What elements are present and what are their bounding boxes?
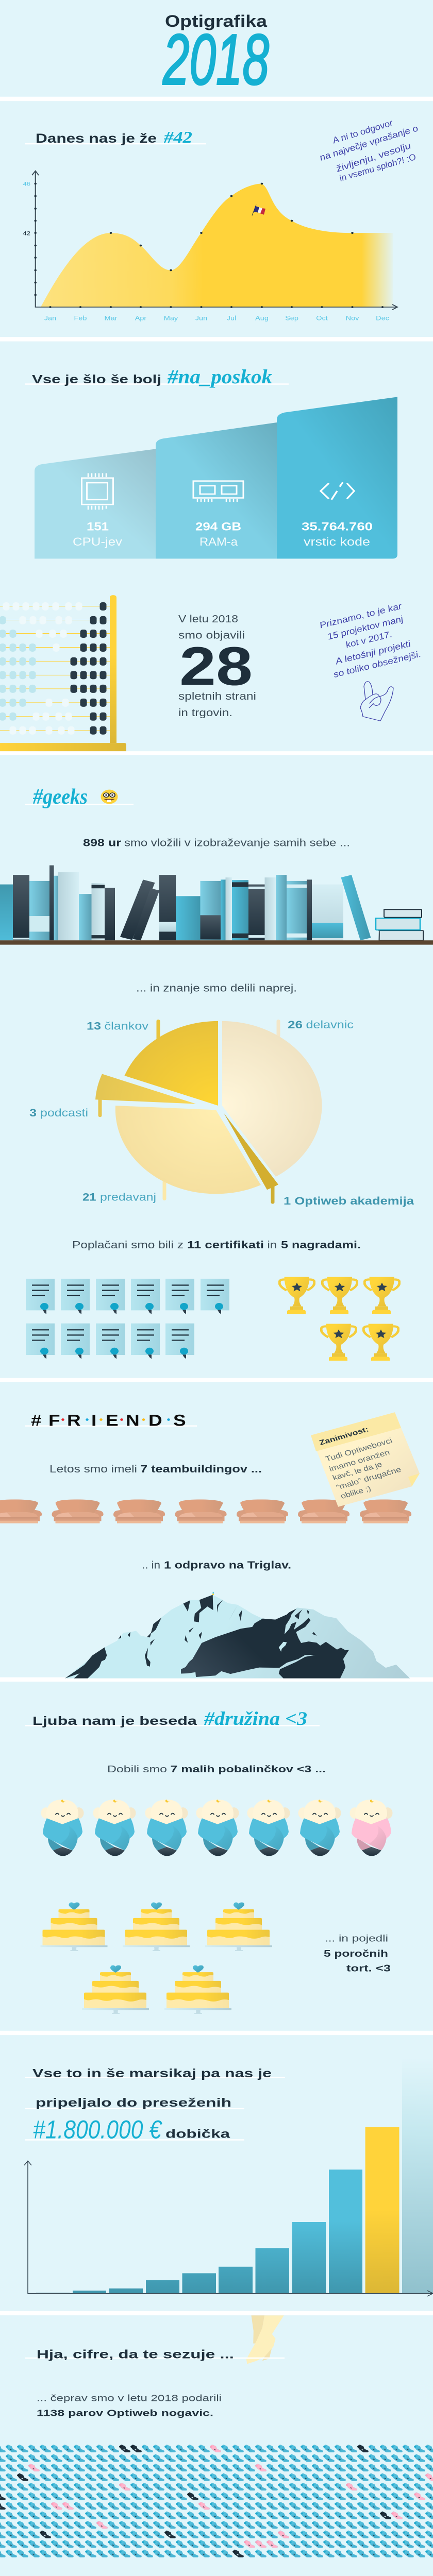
label: 3 podcasti: 3 — [29, 1107, 37, 1119]
panel: profit — [0, 2035, 433, 2311]
panel: geeks — [0, 755, 433, 1378]
heading: Vse to in še marsikaj — [25, 2067, 285, 2144]
area chart: Sep — [285, 314, 298, 321]
heading: Hja, cifre, da te sezuje: Hja, cifre, da te sezuje ... — [37, 2348, 234, 2361]
heading: Vse to in še marsikaj: dobička — [165, 2128, 230, 2141]
stat card: RAM — [156, 422, 277, 558]
text: 7 teambuildings: 7 teambuildingov ... — [140, 1463, 262, 1475]
sticky note: Zanimivost: imamo oranžen — [328, 1448, 391, 1473]
text block: 28 websites: smo objavili — [178, 629, 245, 641]
handwritten note: fewer projects: Priznamo, to je kar — [318, 601, 404, 630]
panel: title — [0, 0, 433, 99]
area chart — [23, 171, 397, 321]
heading: Danes nas je že #42 — [25, 128, 206, 146]
icon: CPU chip — [81, 473, 113, 510]
stat card: CPU: CPU-jev — [73, 536, 122, 549]
handwritten note: fewer projects: kot v 2017. — [344, 629, 393, 650]
area chart: Aug — [255, 314, 269, 321]
stat card: lines of code: vrstic kode — [304, 536, 370, 549]
area chart: Apr — [135, 314, 147, 321]
stat card: CPU — [35, 449, 156, 558]
text: 1138 pairs of socks: ... čeprav smo v letu 2018 podarili — [37, 2393, 222, 2403]
icon: code brackets — [321, 482, 354, 500]
stat card: CPU: 151 — [87, 521, 109, 533]
handwritten note: answer to everything: življenju, vesolju — [334, 141, 412, 174]
heading: Vse je šlo še bolj #na_poskok: #na_poskok — [167, 366, 272, 388]
text block: 28 websites: V letu 2018 — [178, 613, 238, 625]
area chart: Dec — [376, 314, 389, 321]
sticky note: Zanimivost: Tudi Optiwebovci — [324, 1437, 394, 1463]
panel: infrastructure and projects — [0, 342, 433, 751]
side strip — [402, 2058, 433, 2293]
stat card: RAM: RAM-a — [199, 536, 238, 549]
illustration: bare feet — [246, 2315, 284, 2364]
area chart: 42 — [23, 230, 30, 236]
handwritten note: fewer projects: A letošnji projekti — [334, 638, 412, 666]
text: 898 hours: smo vložili v izobraževanje samih sebe ... — [124, 837, 350, 849]
text: 1138 pairs of socks: 1138 parov Optiweb nogavic. — [37, 2408, 213, 2418]
handwritten note: answer to everything: in vsemu sploh?! :O — [338, 152, 418, 183]
pie chart: knowledge sharing — [29, 1019, 414, 1207]
icons: 5 wedding cakes — [40, 1903, 272, 2014]
text: 5 wedding cakes: ... in pojedli — [325, 1934, 388, 1944]
heading: Vse je šlo še bolj #na_poskok — [25, 366, 289, 388]
heading: Ljuba nam je beseda #družina <3 — [25, 1708, 320, 1729]
text: 7 babies — [107, 1764, 326, 1775]
text block: 28 websites: in trgovin. — [178, 707, 232, 719]
label: 21 predavanj: predavanj — [100, 1191, 156, 1203]
heading: #geeks — [25, 785, 134, 808]
heading: Danes nas je že #42: #42 — [163, 128, 192, 146]
stat card: lines of code — [277, 397, 397, 558]
illustration: abacus — [0, 595, 126, 751]
pattern: socks — [0, 2445, 433, 2558]
handwritten note: fewer projects: so toliko obsežnejši. — [332, 649, 422, 680]
heading: Ljuba nam je beseda #družina <3: Ljuba nam je beseda — [32, 1715, 197, 1728]
area chart: Jul — [227, 314, 236, 321]
handwritten note: answer to everything: A ni to odgovor — [330, 117, 395, 145]
handwritten note: answer to everything — [318, 117, 420, 183]
heading: #geeks: #geeks — [32, 785, 88, 808]
icons: 7 babies — [41, 1800, 393, 1856]
panel: headcount chart — [0, 101, 433, 337]
heading: Vse to in še marsikaj: pripeljalo do preseženih — [36, 2096, 231, 2110]
icon: rock hand — [360, 682, 393, 721]
sticky note: Zanimivost: Zanimivost: — [318, 1426, 370, 1447]
panel: friends — [0, 1382, 433, 1679]
text: 5 wedding cakes: tort. <3 — [346, 1963, 391, 1974]
label: 26 delavnic: 26 — [288, 1019, 303, 1031]
text: certificates and awards: 11 certifikati — [187, 1239, 264, 1251]
area chart: Jun — [195, 314, 207, 321]
heading: Ljuba nam je beseda #družina <3: #družina <3 — [204, 1708, 307, 1729]
text: 7 babies: Dobili smo — [107, 1764, 167, 1775]
icons: 11 certificates — [26, 1279, 229, 1359]
icon: French flag — [252, 205, 265, 215]
panel: socks — [0, 2315, 433, 2576]
text: knowledge shared: ... in znanje smo delili naprej. — [136, 982, 297, 994]
area chart: Oct — [316, 314, 328, 321]
heading: Vse to in še marsikaj: #1.800.000 € — [33, 2115, 162, 2144]
text: certificates and awards — [72, 1239, 361, 1251]
text block: 28 websites: spletnih strani — [178, 690, 256, 702]
heading: Vse to in še marsikaj: Vse to in še marsikaj pa nas je — [32, 2067, 272, 2080]
text: certificates and awards: in — [267, 1239, 277, 1251]
label: 13 članki: 13 — [87, 1020, 101, 1032]
icon: nerd emoji — [101, 790, 118, 804]
area chart: Feb — [74, 314, 87, 321]
text: Triglav: .. in — [142, 1559, 160, 1571]
sticky note: Zanimivost — [311, 1412, 420, 1507]
area chart: Jan — [44, 314, 56, 321]
text: 5 wedding cakes: 5 poročnih — [324, 1948, 388, 1959]
heading: Vse je šlo še bolj #na_poskok: Vse je šlo še bolj — [32, 373, 161, 386]
text: 898 hours: 898 ur — [83, 837, 121, 849]
illustration: bookshelf — [0, 866, 433, 945]
handwritten note: answer to everything: na največje vprašanje o — [318, 123, 420, 162]
text: certificates and awards: Poplačani smo bili z — [72, 1239, 184, 1251]
text: 7 teambuildings — [49, 1463, 262, 1475]
label: 1 Optiweb akademija: 1 Optiweb akademija — [284, 1195, 414, 1207]
area chart: May — [164, 314, 178, 321]
panel: family — [0, 1682, 433, 2031]
heading: Danes nas je že #42: Danes nas je že — [36, 131, 157, 145]
text block: 28 websites — [178, 613, 256, 719]
bar chart: profit by year — [24, 2127, 433, 2296]
area chart: Mar — [105, 314, 118, 321]
label: 13 članki: člankov — [104, 1020, 148, 1032]
label: 26 delavnic: delavnic — [306, 1019, 354, 1031]
label: 21 predavanj: 21 — [82, 1191, 96, 1203]
label: 3 podcasti: podcasti — [40, 1107, 88, 1119]
sticky note: Zanimivost: oblike ;) — [340, 1484, 372, 1501]
sticky note: Zanimivost: kavč, le da je — [331, 1461, 384, 1482]
icons: 7 sofas — [0, 1499, 411, 1523]
text: Triglav: 1 odpravo na Triglav. — [164, 1559, 291, 1571]
text: certificates and awards: 5 nagradami. — [281, 1239, 361, 1251]
icons: 5 trophies — [279, 1277, 399, 1361]
title: Optigrafika: Optigrafika — [165, 12, 267, 30]
title: 2018: 2018 — [162, 20, 269, 99]
stat card: lines of code: 35.764.760 — [302, 521, 373, 533]
area chart: 46 — [23, 180, 30, 187]
sticky note: Zanimivost: “malo” drugačne — [335, 1466, 403, 1492]
text: 5 wedding cakes — [324, 1934, 391, 1974]
text: 7 teambuildings: Letos smo imeli — [49, 1463, 137, 1475]
icon: RAM module — [193, 481, 243, 502]
illustration: Triglav mountain — [65, 1592, 410, 1679]
handwritten note: fewer projects: 15 projektov manj — [326, 614, 405, 641]
heading: #FRIENDS: #FRIENDS — [31, 1412, 186, 1430]
handwritten note: fewer projects — [318, 601, 422, 680]
text: 7 babies: 7 malih pobalinčkov <3 ... — [170, 1764, 326, 1775]
area chart: Nov — [346, 314, 359, 321]
text block: 28 websites: 28 — [179, 636, 253, 697]
stat card: RAM: 294 GB — [195, 521, 241, 533]
text: 1138 pairs of socks — [37, 2393, 222, 2418]
